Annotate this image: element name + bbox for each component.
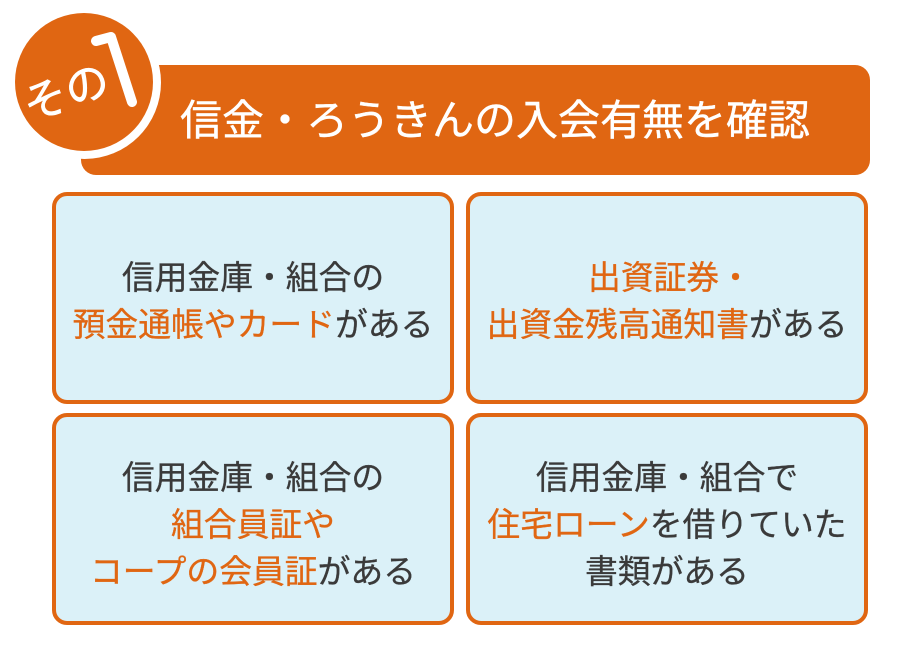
panel: investment certificate: 出資証券・ <box>588 259 752 296</box>
panel: housing loan documents: 住宅ローンを借りていた <box>487 506 847 543</box>
title: 信金・ろうきんの入会有無を確認 <box>180 97 810 144</box>
panel: passbook or card <box>52 192 454 404</box>
panel: member card: 信用金庫・組合の <box>122 459 384 496</box>
panel: passbook or card: 預金通帳やカードがある <box>73 306 433 343</box>
panel: housing loan documents: 信用金庫・組合で <box>536 459 798 496</box>
panel: investment certificate: 出資金残高通知書がある <box>487 306 847 343</box>
badge: その1: その <box>17 55 116 131</box>
panel: investment certificate <box>466 192 868 404</box>
panel: member card: 組合員証や <box>171 506 335 543</box>
panel: member card: コープの会員証がある <box>90 553 416 590</box>
panel: passbook or card: 信用金庫・組合の <box>122 259 384 296</box>
panel: housing loan documents: 書類がある <box>585 553 749 590</box>
panel: housing loan documents <box>466 413 868 625</box>
panel: member card <box>52 413 454 625</box>
title banner <box>81 65 870 175</box>
badge: その1 <box>15 13 153 151</box>
badge white ring <box>8 6 161 159</box>
